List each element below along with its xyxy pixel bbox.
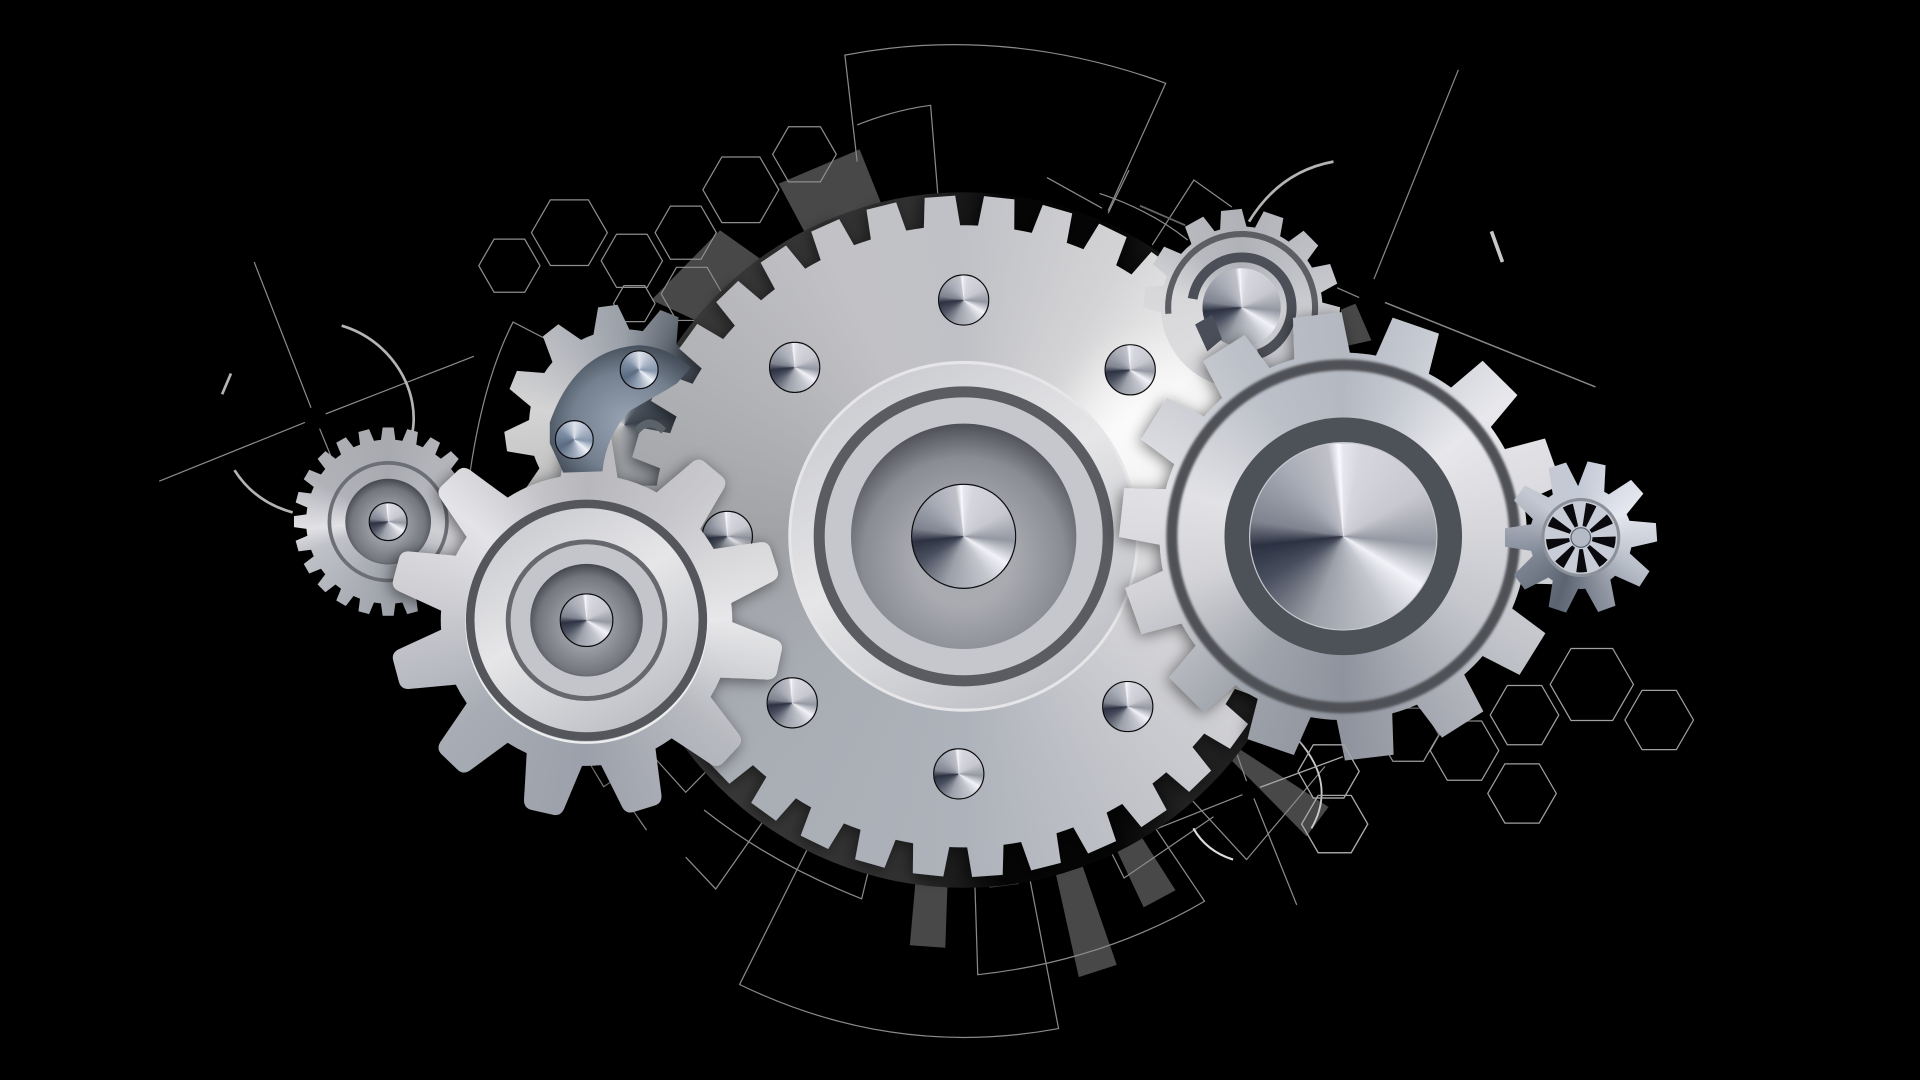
bolt: bottom: [933, 748, 984, 800]
highlight on central gear: [1056, 322, 1239, 555]
left gear rings: [467, 503, 707, 743]
bolt: top: [938, 274, 989, 326]
central hub cone: [911, 484, 1016, 589]
gear: small top right: [1151, 208, 1340, 384]
left gear cone: [560, 593, 613, 647]
bolt: lower band: [555, 420, 594, 459]
spoked wheel: [1543, 500, 1619, 576]
gear: small far left: [294, 427, 467, 616]
bright lines over the lower right bar: [1260, 745, 1368, 853]
small left cone: [369, 502, 408, 541]
top right gear arcs: [1168, 234, 1315, 354]
shadow rim behind large gear: [616, 192, 1311, 888]
hexagon outlines, upper left cluster: [479, 127, 836, 322]
bolt: lower left: [767, 677, 818, 729]
bolt: upper right: [1104, 344, 1156, 396]
curved slate band with two bolts: [550, 345, 691, 473]
bolt: upper left: [769, 342, 820, 393]
bolt: upper band: [620, 350, 659, 389]
gear: tiny far right with spoked wheel: [1505, 461, 1658, 612]
gear: upper left, partly hidden: [504, 304, 702, 488]
technical line drawing: sectors, arcs and rays: [159, 45, 1596, 1037]
top right gear cone: [1202, 268, 1281, 347]
central gear body: [624, 190, 1250, 879]
central hub rings: [790, 362, 1138, 710]
right gear cone: [1249, 442, 1438, 631]
illustration: interlocking metal gears: [159, 44, 1694, 1038]
small left rings: [329, 463, 447, 580]
bolt: left, partly hidden: [702, 511, 753, 562]
hexagon outlines, lower right cluster: [1298, 648, 1693, 853]
dark radial bars behind gears: [651, 149, 1371, 977]
dark fragment under the cone: [1195, 315, 1222, 351]
gear: left medium: [382, 430, 788, 820]
gear: large central: [624, 190, 1250, 879]
gear: right large: [1110, 306, 1555, 762]
right gear rings: [1172, 365, 1515, 708]
bright accent arcs and ticks: [222, 162, 1502, 860]
bolt: lower right: [1102, 681, 1153, 732]
